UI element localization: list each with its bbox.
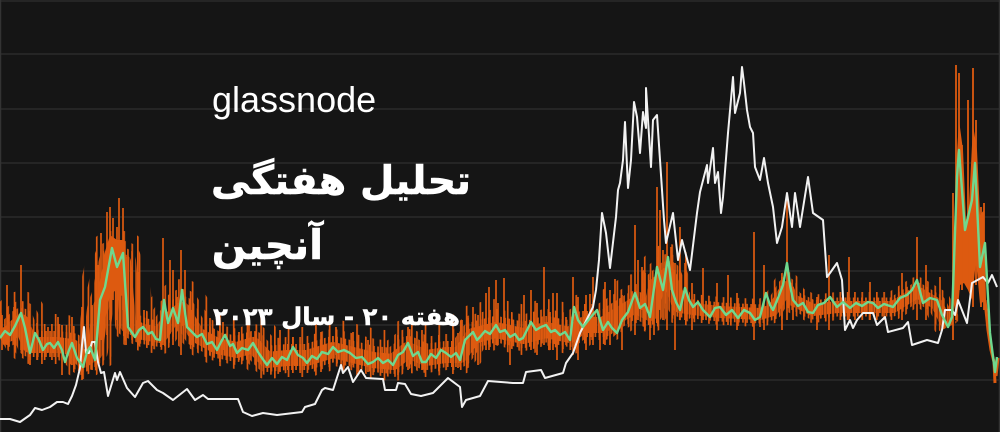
- title line 2: آنچین: [212, 221, 323, 269]
- subtitle: week and year: هفته ۲۰ - سال ۲۰۲۳: [213, 302, 460, 331]
- title line 1: تحلیل هفتگی: [211, 158, 471, 204]
- logo wordmark: glassnode: glassnode: [212, 79, 376, 120]
- green series: smoothed average: [0, 150, 997, 372]
- orange series: raw metric: [0, 65, 998, 383]
